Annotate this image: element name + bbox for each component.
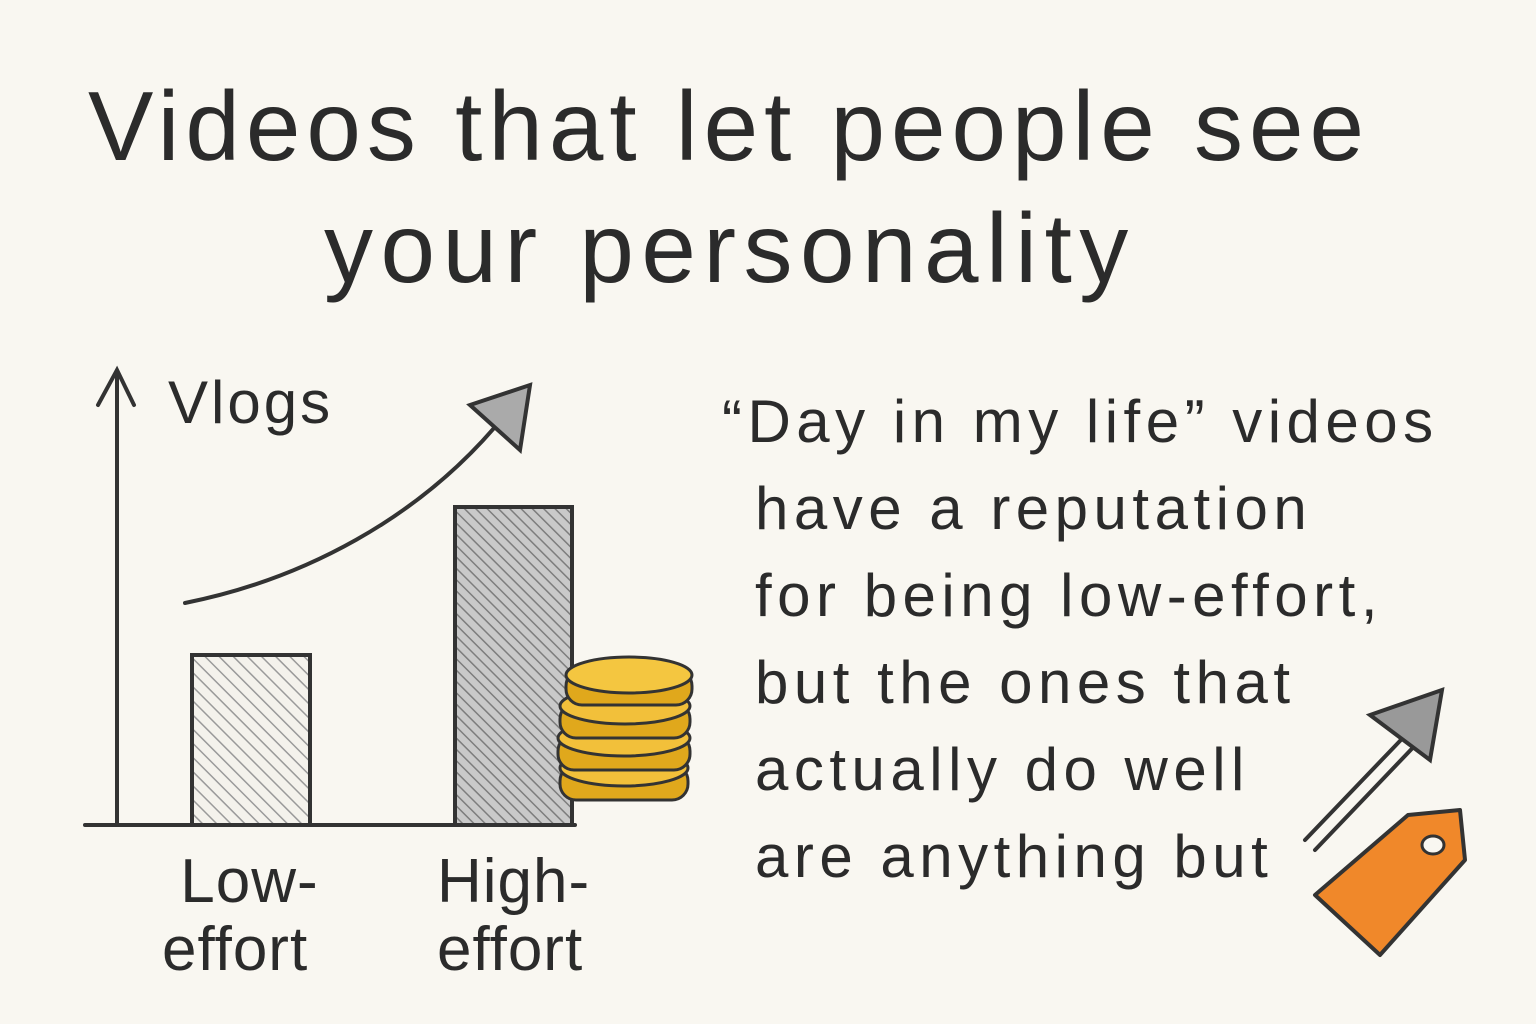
bar: high-effort	[455, 507, 572, 825]
bar: low-effort	[192, 655, 310, 825]
label: high-effort: High-	[437, 847, 590, 916]
text: actually do well	[755, 736, 1250, 803]
title: your personality	[324, 193, 1136, 303]
bar chart: vlogs effort	[83, 366, 694, 827]
arrow: growth curve	[185, 385, 530, 603]
label: low-effort: Low-	[180, 847, 319, 916]
label: low-effort	[162, 847, 319, 984]
text: for being low-effort,	[755, 562, 1383, 629]
icon: coin stack	[558, 657, 692, 800]
label: high-effort: effort	[437, 915, 583, 984]
axes	[85, 370, 575, 825]
label: low-effort: effort	[162, 915, 308, 984]
icon: arrow and price tag	[1302, 687, 1467, 958]
text: but the ones that	[755, 649, 1296, 716]
label: high-effort	[437, 847, 590, 984]
text: have a reputation	[755, 475, 1312, 542]
axis label: vlogs: Vlogs	[168, 369, 333, 436]
text: are anything but	[755, 823, 1273, 890]
text block: description: “Day in my life” videos	[722, 388, 1439, 455]
title	[88, 71, 1370, 303]
title: Videos that let people see	[88, 71, 1370, 181]
